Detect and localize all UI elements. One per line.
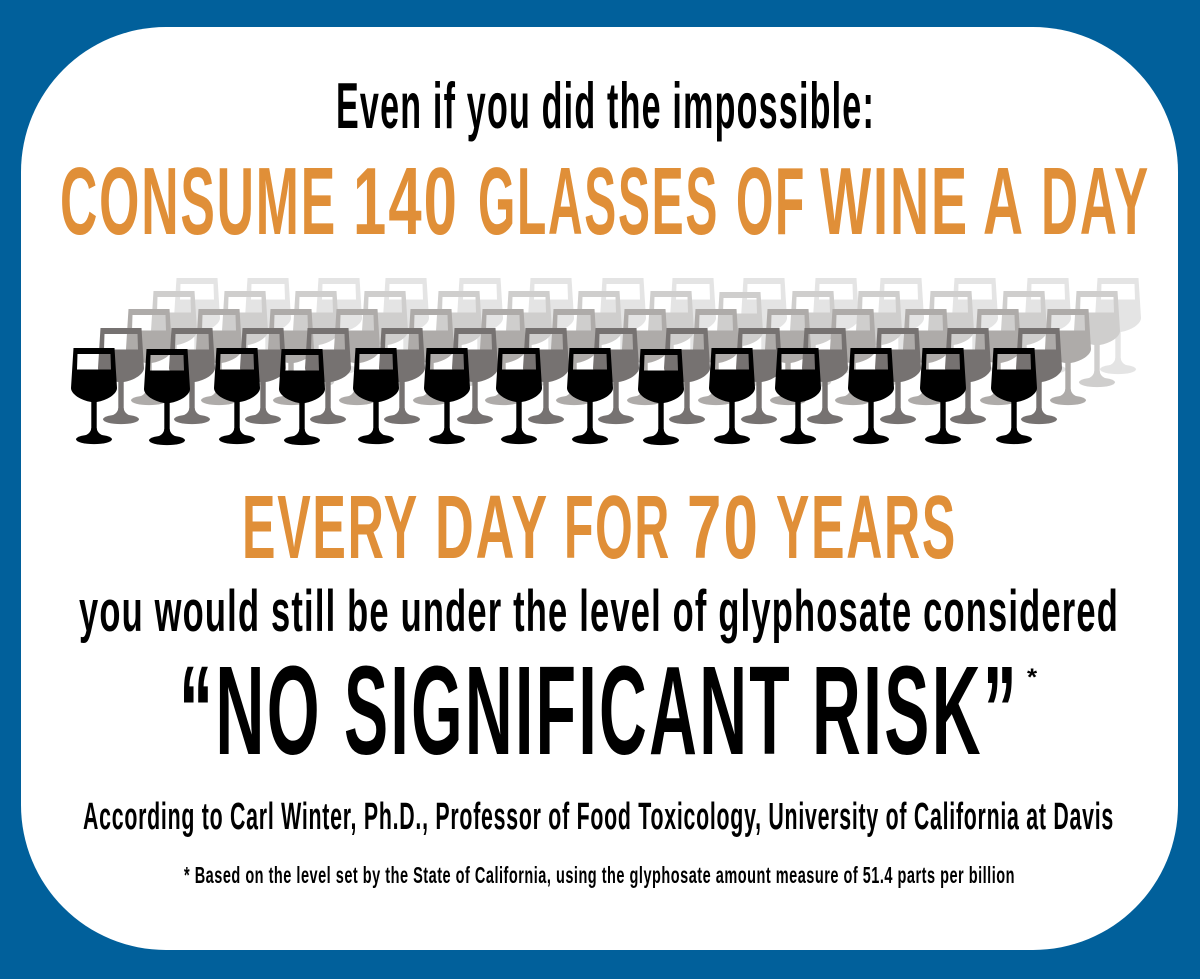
heading: every day for 70 years <box>242 478 957 578</box>
chart: rows of wine glasses <box>71 278 1141 445</box>
glass row 2 <box>98 328 1062 424</box>
heading: every day for 70 years: EVERY <box>242 478 419 578</box>
heading: consume 140 glasses: A <box>983 148 1025 255</box>
heading: consume 140 glasses <box>60 148 1150 255</box>
footnote marker: * <box>1027 664 1038 691</box>
heading: every day for 70 years: 70 <box>687 478 760 578</box>
glass row 3 <box>126 309 1091 405</box>
heading: consume 140 glasses: WINE <box>820 148 969 255</box>
heading: consume 140 glasses: OF <box>736 148 806 255</box>
heading: no significant risk <box>179 640 1019 781</box>
heading: every day for 70 years: FOR <box>564 478 671 578</box>
heading: consume 140 glasses: GLASSES <box>478 148 719 255</box>
heading: no significant risk: RISK” <box>812 640 1019 781</box>
glass row 4 <box>151 291 1120 388</box>
heading: no significant risk: “NO <box>179 640 322 781</box>
glass row 1 (front, black) <box>71 348 1037 445</box>
heading: consume 140 glasses: 140 <box>353 148 459 255</box>
heading: every day for 70 years: YEARS <box>776 478 957 578</box>
heading: no significant risk: SIGNIFICANT <box>344 640 792 781</box>
heading: consume 140 glasses: CONSUME <box>60 148 337 255</box>
glass row 5 (lightest) <box>174 278 1141 374</box>
heading: every day for 70 years: DAY <box>435 478 549 578</box>
